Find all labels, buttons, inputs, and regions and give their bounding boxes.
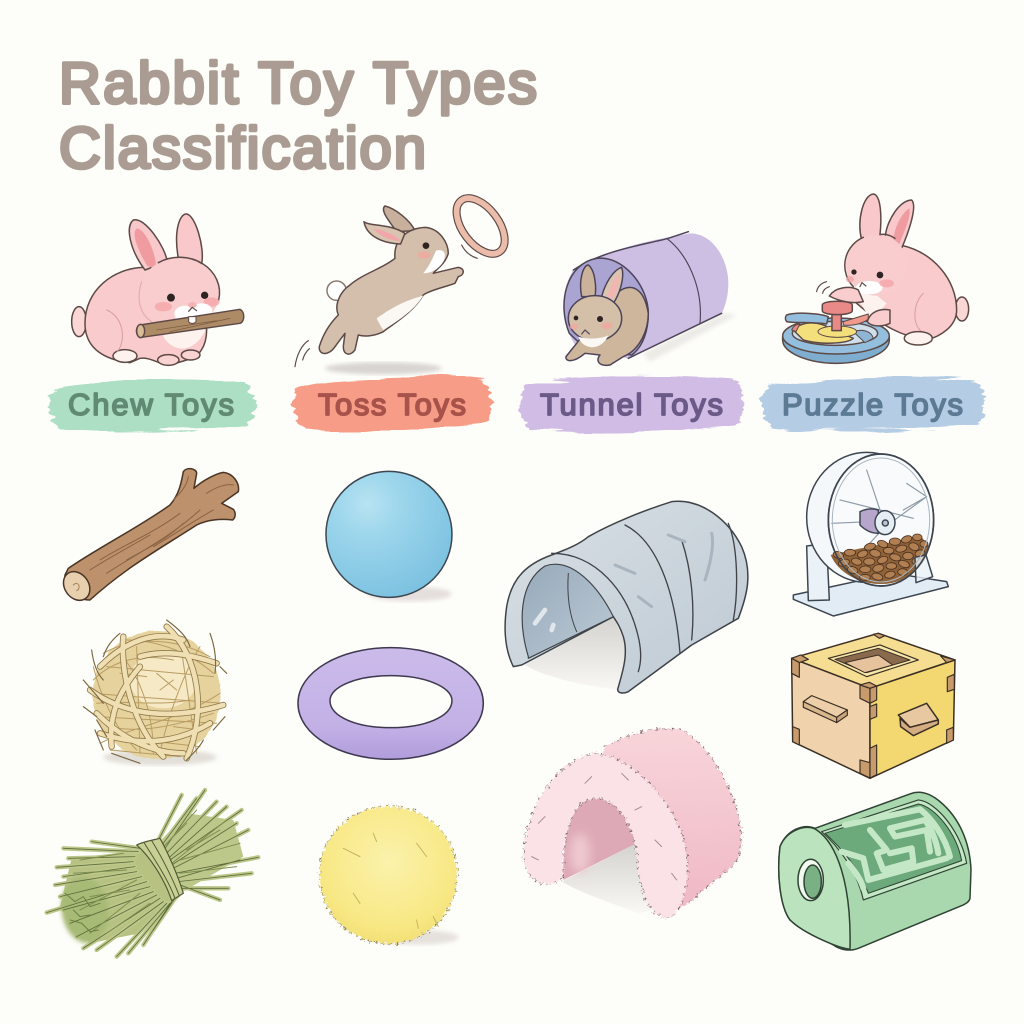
chew toy: hay bundle (47, 790, 258, 957)
title: Rabbit Toy Types (59, 51, 537, 116)
label: tunnel toys: Tunnel Toys (540, 387, 723, 422)
puzzle toy: green maze (779, 792, 971, 950)
label: toss toys (292, 377, 491, 432)
puzzle toy: clear wheel with pellets (793, 452, 948, 616)
chew toy: hay ball (83, 620, 227, 765)
title (59, 51, 537, 181)
category: toss toys rabbit with ring (295, 190, 514, 374)
toss toy: purple ring (298, 648, 483, 759)
chew toy: wooden stick (58, 469, 239, 605)
label: puzzle toys: Puzzle Toys (782, 387, 963, 422)
title: Classification (59, 116, 426, 181)
category: tunnel toys rabbit in purple tunnel (563, 232, 737, 365)
puzzle toy: wooden shape box (792, 633, 955, 778)
tunnel toy: pink fur tunnel (523, 729, 741, 918)
label: toss toys: Toss Toys (318, 387, 466, 422)
tunnel toy: gray fabric tunnel (505, 501, 748, 693)
label: chew toys: Chew Toys (68, 387, 234, 422)
category: puzzle toys rabbit with puzzle disc (783, 194, 969, 363)
toss toy: yellow pom ball (319, 806, 458, 945)
label: tunnel toys (519, 376, 743, 432)
label: puzzle toys (762, 378, 985, 431)
toss toy: blue ball (326, 471, 452, 601)
category: chew toys rabbit (72, 214, 244, 365)
label: chew toys (47, 379, 255, 432)
